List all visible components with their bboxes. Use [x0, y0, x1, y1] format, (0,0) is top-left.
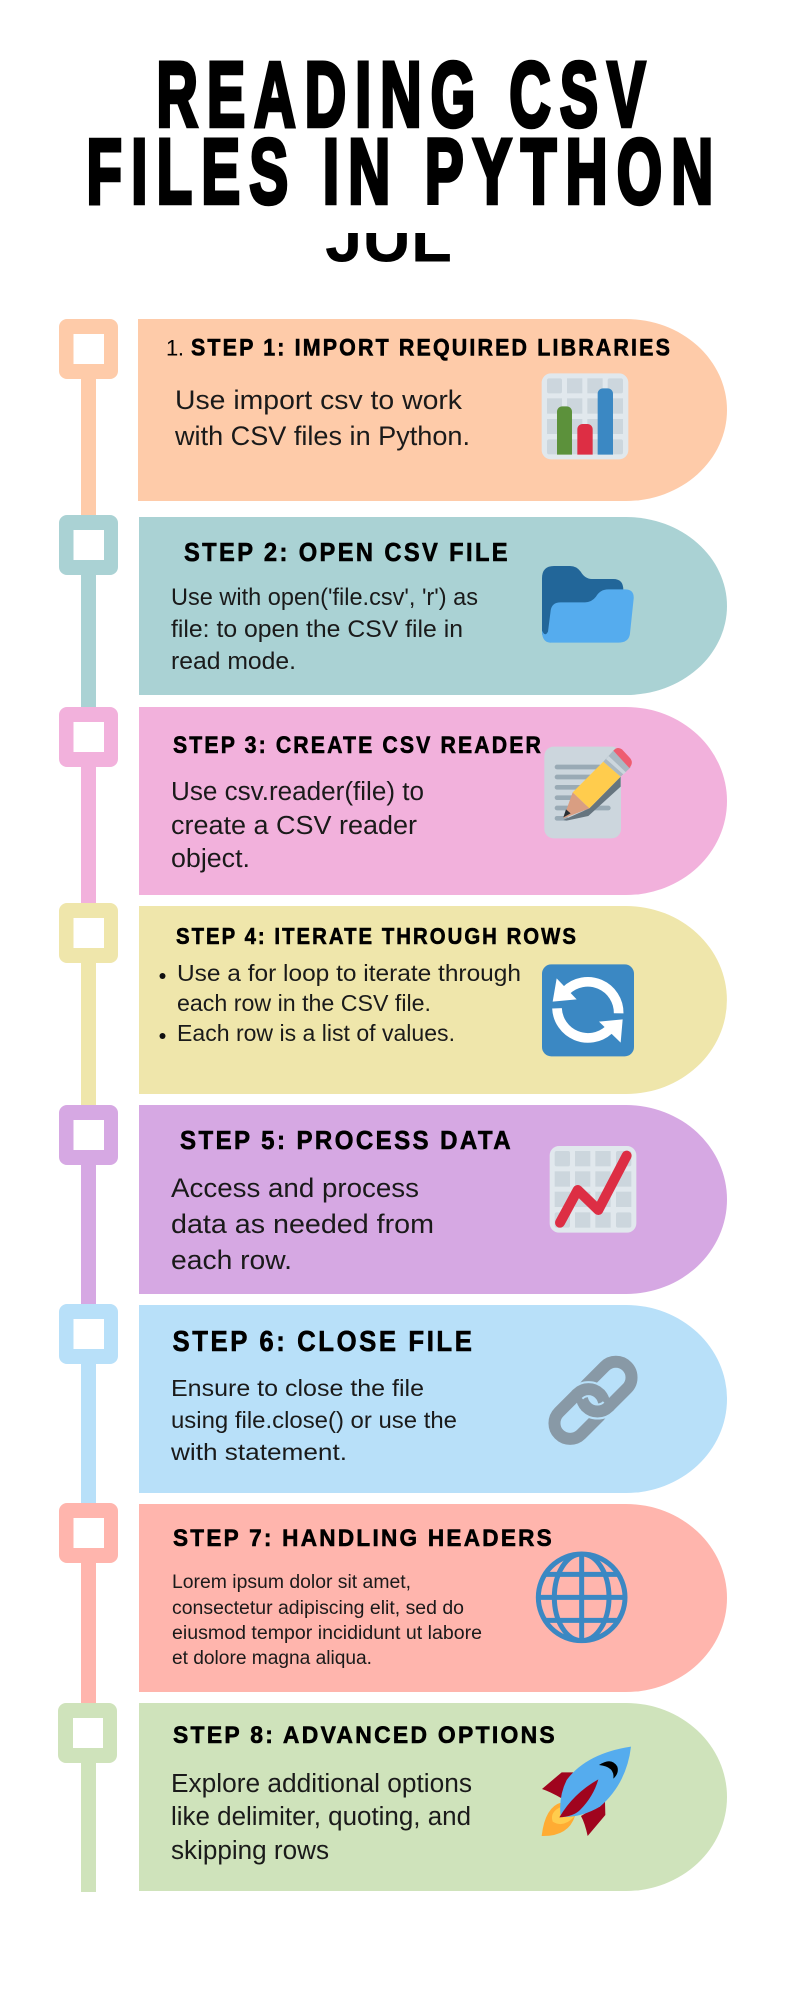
marker: step 2 [59, 515, 118, 575]
number and heading: step 1: 1. [166, 336, 184, 360]
timeline stem: step 2 [81, 570, 96, 710]
timeline stem: step 6 [81, 1360, 96, 1506]
heading: step 4: STEP 4: ITERATE THROUGH ROWS [176, 923, 578, 949]
marker: step 6 [59, 1304, 118, 1364]
clipped subtitle text: JUL [325, 200, 452, 276]
body text: step 1: with CSV files in Python. [174, 421, 470, 451]
marker: step 4 [59, 903, 118, 963]
timeline stem: step 1 [81, 370, 96, 520]
panel: step 6 [139, 1305, 727, 1493]
icon: refresh arrows [542, 964, 634, 1056]
bullet list: step 4: each row in the CSV file. [177, 990, 431, 1016]
infographic canvas [58, 60, 727, 1892]
heading: step 8: STEP 8: ADVANCED OPTIONS [173, 1722, 557, 1749]
body text: step 2: Use with open('file.csv', 'r') as [171, 584, 478, 611]
body text: step 2: read mode. [171, 648, 296, 675]
marker: step 3 [59, 707, 118, 767]
body text: step 1 [174, 385, 470, 451]
body text: step 3: Use csv.reader(file) to [171, 778, 424, 806]
icon: rocket [542, 1747, 631, 1836]
bullet list: step 4: Each row is a list of values. [177, 1020, 455, 1046]
body text: step 6: Ensure to close the file [171, 1375, 424, 1401]
body text: step 3 [171, 778, 424, 873]
panel: step 2 [139, 517, 727, 695]
body text: step 5: each row. [171, 1245, 292, 1275]
body text: step 8: like delimiter, quoting, and [171, 1803, 471, 1831]
heading: step 2: STEP 2: OPEN CSV FILE [184, 537, 510, 567]
body text: step 2 [171, 584, 478, 675]
marker: step 7 [59, 1503, 118, 1563]
body text: step 7: consectetur adipiscing elit, sed do [172, 1598, 464, 1619]
body text: step 7 [172, 1572, 482, 1669]
body text: step 3: object. [171, 845, 250, 873]
icon: bar chart [542, 373, 628, 459]
body text: step 6: with statement. [170, 1439, 347, 1465]
body text: step 3: create a CSV reader [171, 812, 418, 840]
panel: step 4 [139, 906, 727, 1094]
timeline stem: step 8 [81, 1760, 96, 1892]
heading: step 7: STEP 7: HANDLING HEADERS [173, 1525, 554, 1552]
body text: step 8: skipping rows [171, 1837, 329, 1865]
heading: step 5: STEP 5: PROCESS DATA [180, 1125, 513, 1155]
body text: step 8 [171, 1770, 472, 1865]
number and heading: step 1: STEP 1: IMPORT REQUIRED LIBRARIES [191, 334, 672, 362]
title [86, 44, 722, 223]
bullet list: step 4 [160, 960, 521, 1046]
marker: step 1 [59, 319, 118, 379]
body text: step 5: Access and process [171, 1173, 419, 1203]
panel: step 3 [139, 707, 727, 895]
marker: step 8 [58, 1703, 117, 1763]
icon: chain link [548, 1355, 638, 1445]
marker: step 5 [59, 1105, 118, 1165]
body text: step 6 [170, 1375, 457, 1465]
icon: trending line chart [550, 1146, 636, 1233]
timeline stem: step 4 [81, 960, 96, 1108]
body text: step 2: file: to open the CSV file in [171, 616, 463, 643]
body text: step 7: Lorem ipsum dolor sit amet, [172, 1572, 411, 1593]
body text: step 6: using file.close() or use the [171, 1407, 457, 1433]
icon: globe [537, 1554, 627, 1641]
body text: step 1: Use import csv to work [175, 385, 463, 415]
body text: step 8: Explore additional options [171, 1770, 472, 1798]
bullet list: step 4: Use a for loop to iterate through [177, 960, 521, 986]
body text: step 7: eiusmod tempor incididunt ut labore [172, 1623, 482, 1644]
body text: step 5: data as needed from [171, 1209, 434, 1239]
body text: step 5 [171, 1173, 434, 1275]
panel: step 1 [138, 319, 727, 501]
timeline stem: step 7 [81, 1560, 96, 1706]
icon: folder [542, 566, 634, 643]
heading: step 3: STEP 3: CREATE CSV READER [173, 732, 543, 759]
body text: step 7: et dolore magna aliqua. [172, 1648, 372, 1669]
heading: step 6: STEP 6: CLOSE FILE [172, 1326, 474, 1358]
panel: step 8 [139, 1703, 727, 1891]
timeline stem: step 3 [81, 760, 96, 906]
icon: memo and pencil [544, 747, 632, 838]
panel: step 7 [139, 1504, 727, 1692]
timeline stem: step 5 [81, 1160, 96, 1307]
panel: step 5 [139, 1105, 727, 1294]
